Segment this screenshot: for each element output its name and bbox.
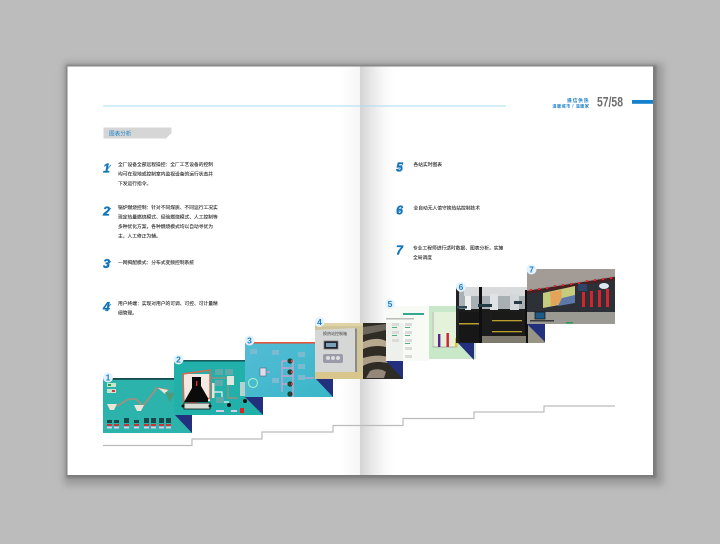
badge 3: 3 [247, 336, 252, 346]
item 5: 5 [396, 160, 404, 174]
open brochure spread [68, 66, 653, 475]
stair line [103, 406, 615, 446]
header rule [103, 106, 506, 107]
badge 1 [103, 372, 113, 382]
triangle 5 [457, 342, 474, 360]
screenshot 1: conveyor control screen [103, 378, 192, 433]
item 4: 4 [102, 300, 110, 314]
item 2: 主，人工修正为辅。 [118, 232, 161, 239]
item 4: 细管理。 [118, 309, 137, 316]
header brand text: 摄信供热 [567, 97, 590, 104]
heading tag [104, 128, 172, 138]
badge 1: 1 [106, 372, 111, 382]
item 1 [103, 161, 213, 187]
photo 4: control box and pipes: 换热站控制箱 [323, 330, 347, 336]
item 4: 用户终端：实现对用户的可调、可控、可计量精 [118, 300, 218, 307]
item 4 [102, 300, 218, 316]
item 3 [103, 257, 194, 271]
item 7: 7 [396, 244, 404, 258]
item 3: 3 [103, 257, 110, 271]
item 1: 全厂设备全部远程操控：全厂工艺设备的控制 [118, 161, 213, 168]
triangle 1 [175, 415, 192, 433]
header brand text [552, 97, 590, 108]
item 7 [396, 244, 504, 261]
heading tag: 图表分析 [109, 130, 132, 138]
item 5 [396, 160, 442, 174]
item 2: 2 [102, 204, 110, 218]
badge 3 [244, 336, 254, 346]
triangle 3 [315, 378, 333, 397]
triangle 2 [245, 397, 263, 415]
item 5: 各站实时图表 [414, 161, 442, 168]
badge 4 [314, 317, 324, 327]
page shadow [64, 63, 663, 485]
item 2: 现定热量燃烧模式、经验燃烧模式、人工控制等 [118, 213, 218, 220]
header blue bar [632, 100, 653, 104]
badge 5: 5 [388, 299, 393, 309]
badge 7 [526, 264, 536, 274]
item 2 [102, 204, 218, 239]
badge 5 [385, 299, 395, 309]
badge 7: 7 [529, 264, 534, 274]
photo 4: control box and pipes [315, 323, 403, 379]
badge 2: 2 [176, 354, 181, 364]
item 1: 均可在现地或控制室内监视设备的运行状态并 [118, 170, 213, 177]
item 2: 多种优化方案，各种燃烧模式均以自动寻优为 [118, 223, 213, 230]
triangle 6 [527, 324, 545, 342]
item 6: 全自动无人值守换热站控制技术 [414, 204, 480, 211]
photo 7: control room video wall [527, 269, 615, 324]
badge 4: 4 [317, 317, 322, 327]
item 7: 专业工程师进行适时数据、图表分析，实施 [413, 244, 504, 251]
screenshot 3: pump control screen [240, 342, 333, 397]
badge 2 [174, 354, 184, 364]
triangle 4 [386, 361, 403, 379]
badge 6 [456, 282, 466, 292]
badge 6: 6 [459, 282, 464, 292]
screenshot 2: boiler control screen [174, 360, 263, 415]
header brand text: 温暖城市 / 温暖家 [552, 102, 590, 108]
item 1: 下发运行指令。 [118, 180, 151, 187]
item 3: 一网揭配模式：分布式变频控制系统 [118, 259, 194, 266]
item 6: 6 [396, 204, 404, 218]
item 2: 锅炉燃烧控制：针对不同煤质、不同运行工况实 [118, 204, 218, 211]
photo 6: heat exchangers [456, 287, 545, 343]
item 6 [396, 204, 480, 218]
page number: 57/58 [597, 94, 623, 110]
item 7: 全局调度 [413, 254, 432, 261]
item 1: 1 [103, 162, 110, 176]
screenshot 5: data table and bar chart [386, 306, 476, 361]
